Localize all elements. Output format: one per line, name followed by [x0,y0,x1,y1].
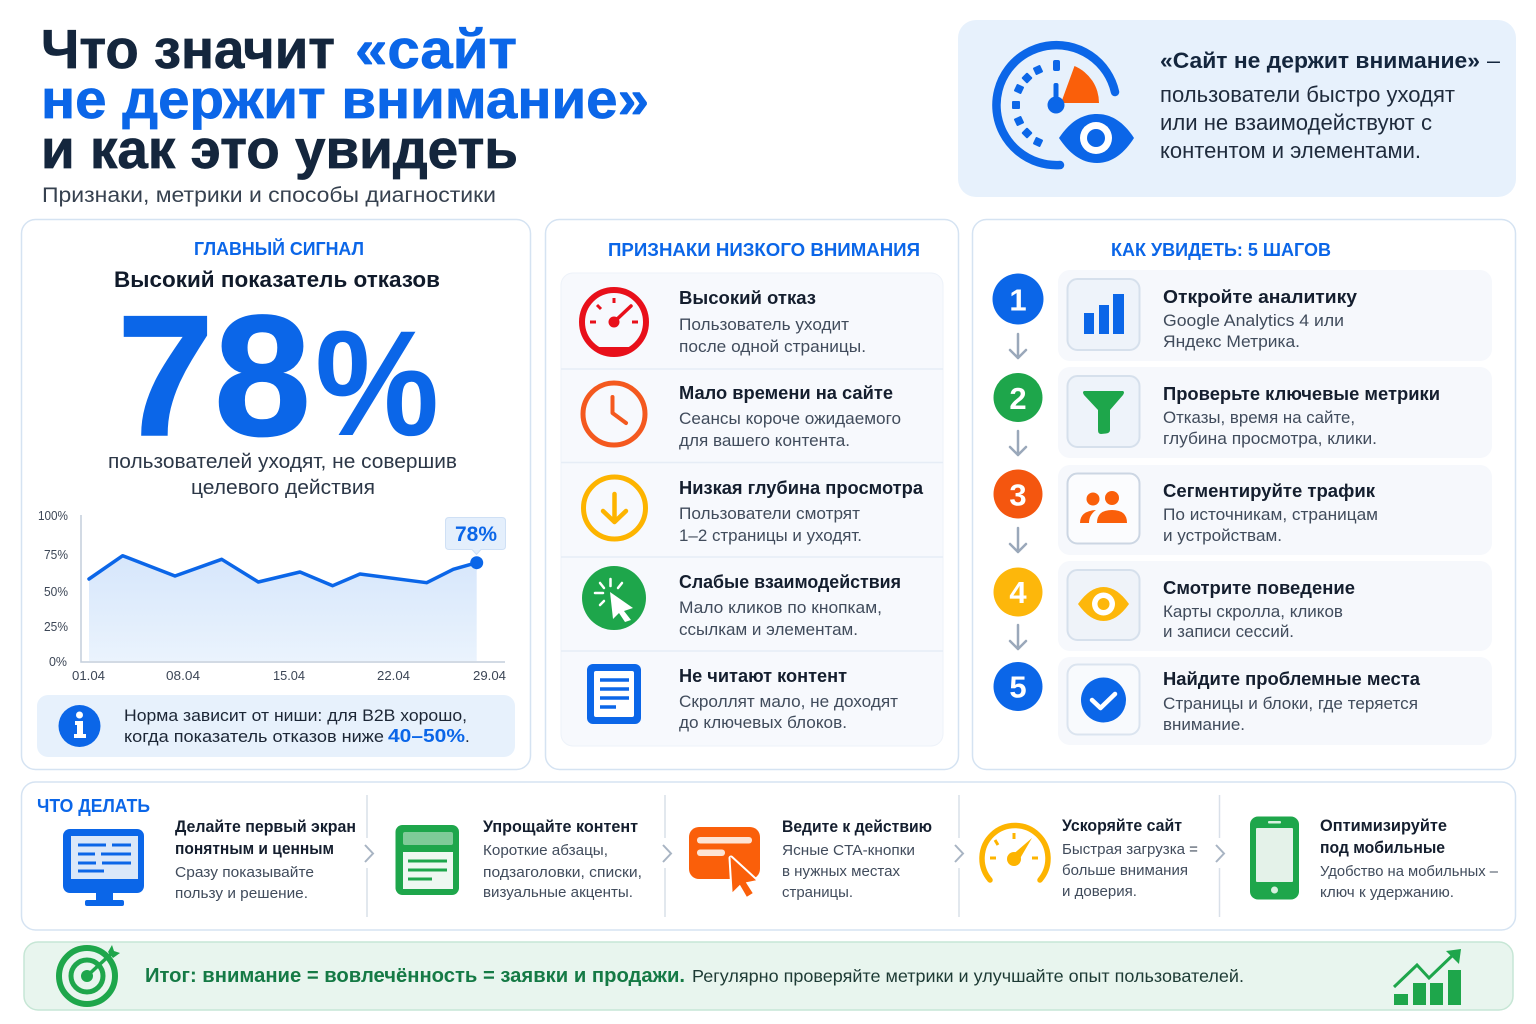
sign: high bounce [582,287,866,356]
heading: what to do: ЧТО ДЕЛАТЬ [37,796,150,816]
line chart: 75% [44,548,68,562]
dividers with chevrons [360,795,1228,917]
line chart: 01.04 [72,669,105,683]
title [41,18,649,180]
step 2: глубина просмотра, клики. [1163,430,1377,448]
line chart: 15.04 [273,669,305,683]
action: simplify content: визуальные акценты. [483,885,633,901]
action: speed up site: Быстрая загрузка = [1062,842,1198,858]
title: Что значит [41,18,335,80]
step 1: Google Analytics 4 или [1163,312,1344,330]
action: mobile optimisation: ключ к удержанию. [1320,885,1454,901]
action: first screen: Сразу показывайте [175,865,314,881]
title: «сайт [355,18,517,80]
step 1: 1 [1009,282,1027,318]
icon: funnel [1068,376,1140,447]
line chart: 25% [44,620,68,634]
sign: low depth: 1–2 страницы и уходят. [679,527,862,545]
step 3 [994,465,1492,555]
sign: little time: Мало времени на сайте [679,382,893,403]
sign: not reading [587,664,898,732]
sign: low depth [584,477,924,545]
step 4: Смотрите поведение [1163,577,1355,598]
sign: low depth: Пользователи смотрят [679,505,860,523]
line chart: 29.04 [473,669,506,683]
sign: high bounce: Пользователь уходит [679,316,849,334]
description: пользователей уходят, не совершив [108,450,457,473]
step 2 [994,367,1492,458]
panel: main signal [22,220,530,770]
sign: little time [583,382,901,450]
callout text: пользователи быстро уходят [1160,82,1455,107]
action: first screen: Делайте первый экран [175,818,356,836]
step 2: Отказы, время на сайте, [1163,409,1355,427]
step 4: и записи сессий. [1163,623,1294,641]
note: norm [37,695,515,757]
note: norm: когда показатель отказов ниже [124,727,384,746]
action: first screen: понятным и ценным [175,840,334,858]
action: first screen: пользу и решение. [175,886,308,902]
sign: high bounce: после одной страницы. [679,338,866,356]
title: и как это увидеть [41,118,518,180]
banner: summary [24,942,1513,1010]
sign: not reading: Скроллят мало, не доходят [679,693,898,711]
heading: steps: КАК УВИДЕТЬ: 5 ШАГОВ [1111,240,1331,260]
heading: signs: ПРИЗНАКИ НИЗКОГО ВНИМАНИЯ [608,240,920,260]
step 2: Проверьте ключевые метрики [1163,383,1440,404]
big number [117,280,439,472]
icon: yellow gauge [982,825,1048,880]
callout text: «Сайт не держит внимание» [1160,48,1480,73]
action: simplify content: Короткие абзацы, [483,843,608,859]
sign: weak interaction: ссылкам и элементам. [679,621,858,639]
step 1: Яндекс Метрика. [1163,333,1300,351]
panel: signs of low attention [546,220,958,770]
icon: people [1068,474,1140,544]
line chart [38,509,506,683]
action: first screen [63,818,356,906]
line chart: 50% [44,585,68,599]
action: lead to action: страницы. [782,885,853,901]
callout text: или не взаимодействуют с [1160,110,1432,135]
note: norm: 40–50% [388,726,465,746]
step 5: 5 [1009,670,1027,704]
icon: bars [1068,279,1140,350]
note: norm: . [465,727,470,746]
description: целевого действия [191,476,375,499]
icon: timer with eye [996,45,1134,165]
step 4 [994,561,1492,651]
action: lead to action: Ясные CTA-кнопки [782,843,915,859]
note: norm: Норма зависит от ниши: для B2B хорошо, [124,706,467,725]
action: lead to action: в нужных местах [782,864,901,880]
heading: main signal: ГЛАВНЫЙ СИГНАЛ [194,238,364,259]
callout text: – [1487,48,1501,73]
icon: document [587,664,641,724]
line chart: 100% [38,509,68,523]
step 5 [994,657,1492,745]
icon: target [59,945,120,1004]
step 3: По источникам, страницам [1163,506,1378,524]
action: mobile optimisation: Удобство на мобильных – [1320,864,1499,880]
icon: CTA button with cursor [689,827,760,896]
action: speed up site: Ускоряйте сайт [1062,817,1182,835]
step 1 [992,270,1492,361]
sign: low depth: Низкая глубина просмотра [679,477,924,498]
panel: five steps [972,220,1516,770]
icon: info [58,705,100,747]
step 5: Найдите проблемные места [1163,668,1421,689]
icon: growth chart [1394,949,1461,1005]
big number: % [315,299,439,467]
panel: definition callout [958,20,1516,197]
icon: down arrow [584,477,646,539]
icon: monitor [63,829,144,906]
summary text [145,965,1244,987]
step 2: 2 [1009,381,1027,416]
icon: click [582,566,646,630]
step 5: внимание. [1163,716,1245,734]
action: mobile optimisation [1250,816,1499,901]
step 5: Страницы и блоки, где теряется [1163,695,1418,713]
action: simplify content: Упрощайте контент [483,818,638,836]
summary text: Регулярно проверяйте метрики и улучшайте опыт пользователей. [692,966,1244,986]
value bubble [446,518,506,554]
action: simplify content: подзаголовки, списки, [483,865,642,881]
callout text: контентом и элементами. [1160,138,1421,163]
icon: eye [1068,570,1140,640]
step 3: и устройствам. [1163,527,1282,545]
description [108,450,457,499]
sign: high bounce: Высокий отказ [679,287,816,308]
subtitle: Признаки, метрики и способы диагностики [42,184,496,207]
action: mobile optimisation: Оптимизируйте [1320,817,1447,835]
subheading: Высокий показатель отказов [114,267,440,292]
panel: what to do [22,782,1516,930]
arrows between steps [1010,334,1026,649]
step 4: Карты скролла, кликов [1163,603,1343,621]
summary text: Итог: внимание = вовлечённость = заявки и продажи. [145,965,685,987]
action: lead to action [689,818,932,901]
sign: not reading: до ключевых блоков. [679,714,847,732]
step 3: Сегментируйте трафик [1163,480,1376,501]
icon: check [1068,664,1140,734]
icon: red gauge [582,290,646,354]
sign: weak interaction: Мало кликов по кнопкам, [679,599,882,617]
sign: weak interaction: Слабые взаимодействия [679,571,901,592]
action: speed up site [982,817,1198,900]
sign: little time: Сеансы короче ожидаемого [679,410,901,428]
step 1: Откройте аналитику [1163,286,1358,307]
line chart: 0% [49,655,67,669]
icon: green document [396,825,459,895]
step 3: 3 [1009,478,1027,512]
line chart: 22.04 [377,669,410,683]
line chart: 08.04 [166,669,200,683]
title: не держит внимание» [41,68,649,130]
action: speed up site: больше внимания [1062,863,1188,879]
action: lead to action: Ведите к действию [782,818,932,836]
sign: not reading: Не читают контент [679,665,847,686]
big number: 78 [117,280,311,472]
sign: little time: для вашего контента. [679,432,850,450]
sign: weak interaction [582,566,901,639]
icon: phone [1250,816,1299,900]
callout text [1160,48,1501,163]
step 4: 4 [1009,575,1027,610]
action: simplify content [396,818,642,901]
icon: clock [583,383,645,445]
value bubble: 78% [455,523,497,546]
action: speed up site: и доверия. [1062,884,1137,900]
action: mobile optimisation: под мобильные [1320,839,1445,857]
list background [561,273,943,746]
